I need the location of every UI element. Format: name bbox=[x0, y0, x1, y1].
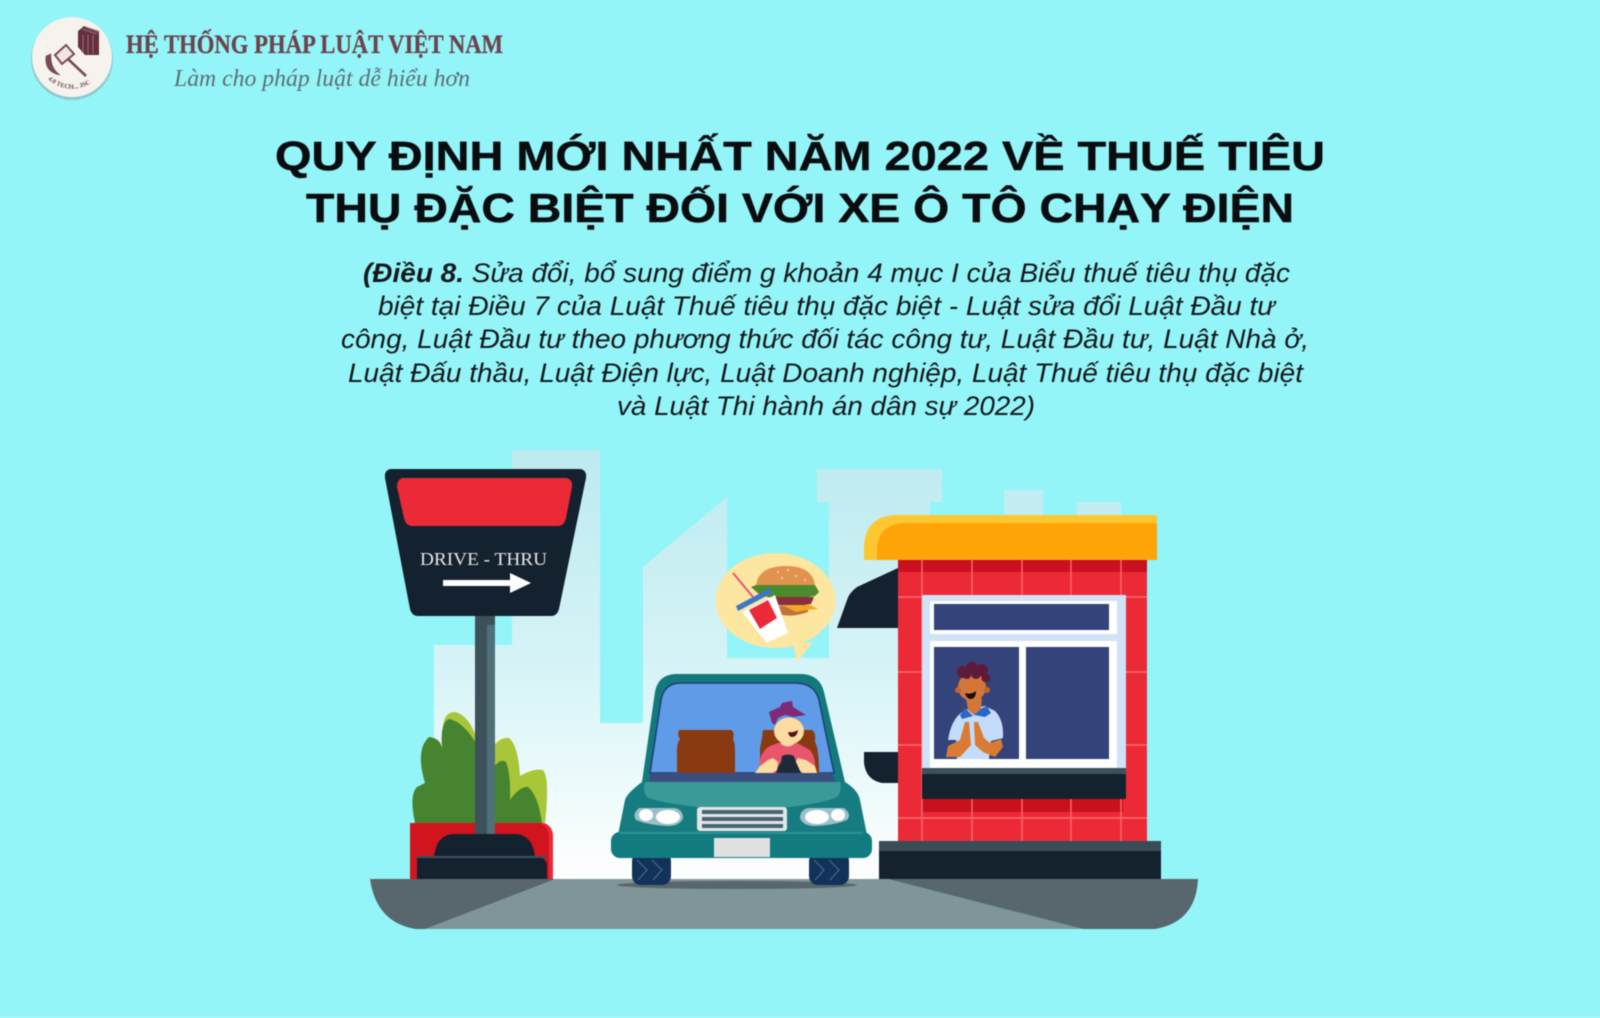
logo badge bbox=[30, 16, 114, 100]
license plate bbox=[714, 838, 770, 857]
road bbox=[370, 879, 1198, 929]
car grille bbox=[697, 807, 787, 831]
legal reference paragraph: và Luật Thi hành án dân sự 2022) bbox=[617, 391, 1035, 421]
car bbox=[611, 674, 872, 889]
icon: books bbox=[78, 26, 99, 55]
legal reference paragraph: (Điều 8. Sửa đổi, bổ sung điểm g khoản 4 mục I của Biểu thuế tiêu thụ đặc bbox=[363, 258, 1290, 288]
car wheels bbox=[632, 852, 849, 885]
drive-thru sign bbox=[385, 469, 586, 616]
booth base bbox=[879, 841, 1161, 879]
sign label: DRIVE - THRU bbox=[420, 549, 547, 569]
driver hands bbox=[755, 758, 817, 773]
attendant mouth bbox=[965, 691, 976, 699]
car bumper bbox=[611, 832, 872, 858]
booth wall bbox=[898, 560, 1147, 841]
attendant hair bbox=[957, 662, 990, 682]
legal reference paragraph: Luật Đấu thầu, Luật Điện lực, Luật Doanh nghiệp, Luật Thuế tiêu thụ đặc biệt bbox=[348, 358, 1305, 388]
driver head bbox=[774, 718, 804, 744]
city skyline background bbox=[434, 450, 1121, 880]
drive-thru booth bbox=[837, 515, 1161, 879]
driver mouth bbox=[788, 730, 798, 737]
logo small text: 4.0 TECH... JSC bbox=[48, 76, 91, 90]
arrow bbox=[443, 573, 531, 593]
driver hair bbox=[769, 701, 806, 725]
sign post bbox=[417, 610, 547, 879]
driver neck bbox=[781, 738, 795, 746]
steering wheel bbox=[776, 754, 801, 773]
sign base bbox=[434, 834, 535, 857]
attendant shirt bbox=[948, 706, 1003, 759]
title: QUY ĐỊNH MỚI NHẤT NĂM 2022 VỀ THUẾ TIÊU bbox=[275, 133, 1325, 179]
driver seat bbox=[760, 730, 819, 773]
title: THỤ ĐẶC BIỆT ĐỐI VỚI XE Ô TÔ CHẠY ĐIỆN bbox=[306, 185, 1294, 231]
brand name: HỆ THỐNG PHÁP LUẬT VIỆT NAM bbox=[126, 30, 503, 59]
attendant head bbox=[958, 673, 986, 701]
title bbox=[275, 133, 1325, 231]
car hood bbox=[644, 782, 841, 807]
driver bbox=[755, 701, 817, 773]
planter bbox=[410, 823, 553, 879]
booth window bbox=[922, 595, 1126, 768]
sign red panel bbox=[397, 478, 572, 526]
car windshield bbox=[650, 683, 834, 773]
booth awning lower bbox=[864, 752, 898, 783]
icon: gavel bbox=[46, 45, 86, 76]
booth counter bbox=[922, 768, 1126, 799]
legal reference paragraph: biệt tại Điều 7 của Luật Thuế tiêu thụ đặc biệt - Luật sửa đổi Luật Đầu tư bbox=[378, 291, 1277, 321]
car body bbox=[618, 782, 867, 835]
brand tagline: Làm cho pháp luật dễ hiểu hơn bbox=[173, 66, 470, 92]
booth roof bbox=[864, 515, 1157, 560]
legal reference paragraph: công, Luật Đầu tư theo phương thức đối tác công tư, Luật Đầu tư, Luật Nhà ở, bbox=[341, 324, 1309, 354]
booth awning upper bbox=[837, 568, 898, 628]
road right shadow bbox=[888, 879, 1198, 929]
passenger seat bbox=[677, 730, 735, 773]
drink cup bbox=[733, 573, 788, 643]
car cabin bbox=[642, 674, 845, 782]
attendant neck and collar bbox=[966, 698, 982, 715]
car shadow bbox=[617, 881, 857, 889]
booth attendant bbox=[946, 662, 1003, 759]
car headlights bbox=[635, 808, 849, 826]
attendant arms and hands bbox=[946, 722, 1003, 757]
legal reference paragraph bbox=[341, 258, 1309, 421]
road left shadow bbox=[370, 879, 555, 929]
burger bbox=[751, 566, 819, 616]
driver shirt bbox=[759, 742, 815, 773]
speech bubble with food bbox=[716, 553, 836, 662]
car dashboard bbox=[649, 773, 835, 782]
plant bbox=[412, 712, 547, 823]
